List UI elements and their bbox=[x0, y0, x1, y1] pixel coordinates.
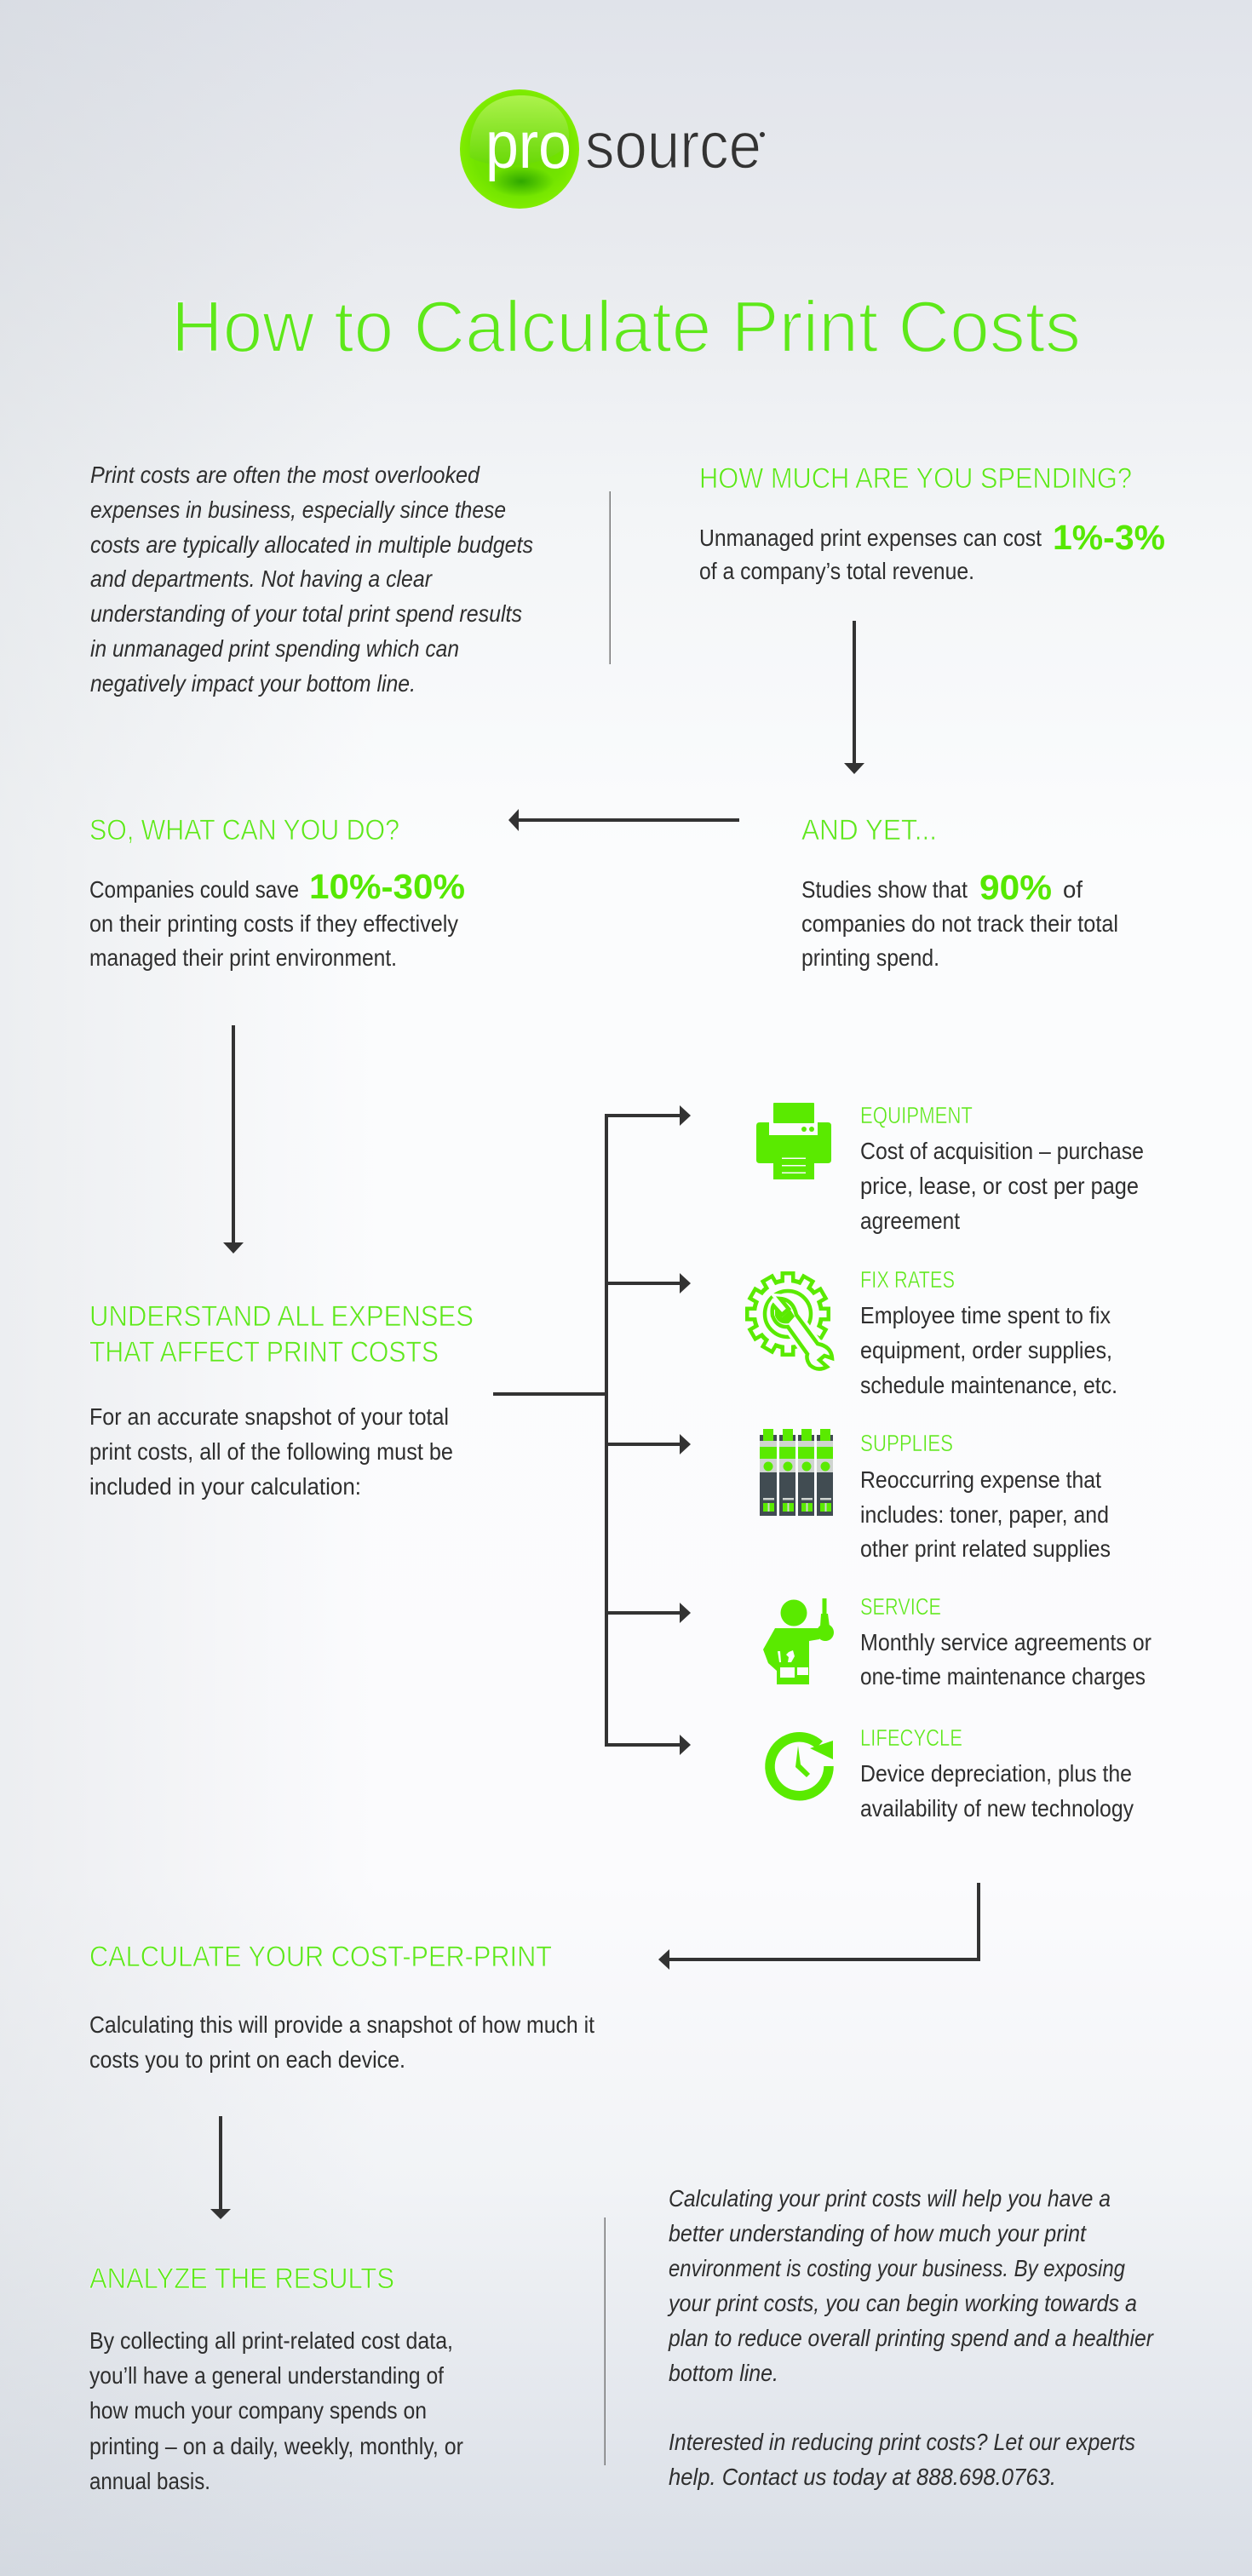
body: and yet: of bbox=[1063, 876, 1083, 903]
text: service bbox=[860, 1629, 1151, 1690]
text: service: Monthly service agreements or bbox=[860, 1629, 1151, 1655]
label: supplies: SUPPLIES bbox=[860, 1430, 953, 1456]
panel: how much are you spending bbox=[699, 462, 1165, 584]
row: lifecycle bbox=[860, 1724, 1134, 1822]
row: fix rates bbox=[860, 1266, 1117, 1398]
body: understand: For an accurate snapshot of your total bbox=[89, 1403, 449, 1430]
body: how much: Unmanaged print expenses can cost bbox=[699, 525, 1042, 551]
body: analyze: annual basis. bbox=[89, 2468, 210, 2494]
panel: calculate your cost-per-print bbox=[89, 1941, 594, 2073]
text block: conclusion and contact: help. Contact us today at 888.698.0763. bbox=[669, 2464, 1056, 2490]
icon: clock with arrow bbox=[770, 1737, 833, 1796]
text: fix rates: Employee time spent to fix bbox=[860, 1302, 1111, 1328]
stat: 90%: 90% bbox=[979, 868, 1052, 907]
body: so what bbox=[89, 876, 458, 971]
arrow: down from how much bbox=[844, 621, 864, 774]
body: analyze: you’ll have a general understanding of bbox=[89, 2362, 444, 2389]
body: and yet bbox=[801, 876, 1118, 971]
label: lifecycle: LIFECYCLE bbox=[860, 1724, 962, 1751]
text block: intro: and departments. Not having a clear bbox=[90, 565, 433, 592]
text: fix rates: schedule maintenance, etc. bbox=[860, 1372, 1117, 1398]
body: and yet: Studies show that bbox=[801, 876, 968, 903]
heading: how much: HOW MUCH ARE YOU SPENDING? bbox=[699, 462, 1132, 495]
text block: intro: understanding of your total print spend results bbox=[90, 600, 522, 627]
row: equipment bbox=[860, 1102, 1144, 1234]
body: understand: print costs, all of the following must be bbox=[89, 1438, 453, 1465]
text: lifecycle: Device depreciation, plus the bbox=[860, 1760, 1132, 1787]
body: and yet: companies do not track their total bbox=[801, 910, 1118, 937]
icon: printer bbox=[756, 1103, 831, 1179]
heading: and yet: AND YET... bbox=[801, 814, 937, 846]
bracket connector with five arrows bbox=[493, 1105, 691, 1755]
arrow: elbow to calculate cost-per-print bbox=[658, 1883, 980, 1970]
panel: analyze the results bbox=[89, 2263, 463, 2494]
panel: understand all expenses bbox=[89, 1300, 474, 1500]
body: how much bbox=[699, 525, 1042, 584]
label: fix rates: FIX RATES bbox=[860, 1266, 955, 1293]
text block: conclusion and contact: better understanding of how much your print bbox=[669, 2220, 1087, 2246]
text: supplies bbox=[860, 1466, 1111, 1562]
body: so what: Companies could save bbox=[89, 876, 299, 903]
arrow: down to understand expenses bbox=[223, 1025, 244, 1254]
panel: and yet bbox=[801, 814, 1118, 971]
body: calculate bbox=[89, 2011, 594, 2073]
text block: intro: in unmanaged print spending which can bbox=[90, 635, 459, 662]
text: supplies: includes: toner, paper, and bbox=[860, 1501, 1109, 1528]
text: supplies: other print related supplies bbox=[860, 1535, 1111, 1562]
heading: analyze: ANALYZE THE RESULTS bbox=[89, 2263, 394, 2295]
label: service: SERVICE bbox=[860, 1593, 941, 1620]
body: calculate: costs you to print on each device. bbox=[89, 2046, 405, 2073]
body: analyze: printing – on a daily, weekly, monthly, or bbox=[89, 2433, 463, 2459]
body: understand bbox=[89, 1403, 453, 1500]
text block: conclusion and contact: Calculating your print costs will help you have a bbox=[669, 2185, 1111, 2212]
text block: conclusion and contact: Interested in reducing print costs? Let our experts bbox=[669, 2429, 1135, 2455]
text block: conclusion and contact: environment is costing your business. By exposing bbox=[669, 2255, 1125, 2281]
label: equipment: EQUIPMENT bbox=[860, 1102, 973, 1128]
body: so what: on their printing costs if they effectively bbox=[89, 910, 458, 937]
text block: intro: Print costs are often the most overlooked bbox=[90, 462, 480, 488]
heading: understand bbox=[89, 1300, 474, 1368]
text block: intro: negatively impact your bottom line. bbox=[90, 670, 416, 697]
title: How to Calculate Print Costs bbox=[171, 287, 1081, 368]
arrow: left to what can you do bbox=[508, 809, 739, 831]
arrow: down to analyze results bbox=[210, 2116, 231, 2219]
text block: conclusion and contact: your print costs, you can begin working towards a bbox=[667, 2290, 1137, 2316]
icon: gear and wrench bbox=[745, 1271, 832, 1369]
text: equipment: agreement bbox=[860, 1208, 960, 1234]
text block: intro: costs are typically allocated in multiple budgets bbox=[90, 531, 533, 558]
text: equipment: Cost of acquisition – purchase bbox=[860, 1138, 1144, 1164]
text block: intro bbox=[90, 462, 533, 697]
text: equipment: price, lease, or cost per page bbox=[860, 1173, 1139, 1199]
body: analyze: By collecting all print-related cost data, bbox=[89, 2327, 453, 2354]
body: how much: of a company’s total revenue. bbox=[699, 558, 974, 584]
heading: calculate: CALCULATE YOUR COST-PER-PRINT bbox=[89, 1941, 552, 1973]
stat: 10%-30%: 10%-30% bbox=[309, 867, 465, 906]
text: lifecycle: availability of new technology bbox=[860, 1795, 1134, 1822]
text: fix rates: equipment, order supplies, bbox=[860, 1337, 1112, 1363]
body: calculate: Calculating this will provide a snapshot of how much it bbox=[89, 2011, 594, 2038]
icon: ink cartridges bbox=[760, 1429, 833, 1516]
heading: so what: SO, WHAT CAN YOU DO? bbox=[89, 814, 399, 846]
body: analyze: how much your company spends on bbox=[89, 2397, 427, 2424]
text: equipment bbox=[860, 1138, 1144, 1234]
stat: 1%-3%: 1%-3% bbox=[1053, 518, 1165, 557]
body: understand: included in your calculation: bbox=[89, 1473, 361, 1500]
row: supplies bbox=[860, 1430, 1111, 1562]
text block: conclusion and contact bbox=[667, 2185, 1154, 2490]
text block: conclusion and contact: bottom line. bbox=[669, 2360, 778, 2386]
heading: understand: THAT AFFECT PRINT COSTS bbox=[89, 1336, 439, 1368]
text: service: one-time maintenance charges bbox=[860, 1663, 1146, 1690]
row: service bbox=[860, 1593, 1151, 1690]
body: and yet: printing spend. bbox=[801, 944, 939, 971]
text: lifecycle bbox=[860, 1760, 1134, 1822]
icon: service technician bbox=[763, 1598, 834, 1684]
logo: prosource: source bbox=[585, 107, 761, 182]
body: analyze bbox=[89, 2327, 463, 2494]
text block: conclusion and contact: plan to reduce overall printing spend and a healthier bbox=[668, 2325, 1154, 2351]
body: so what: managed their print environment. bbox=[89, 944, 397, 971]
logo: prosource: pro bbox=[485, 107, 571, 182]
text: supplies: Reoccurring expense that bbox=[860, 1466, 1101, 1493]
logo: prosource bbox=[460, 89, 765, 209]
text: fix rates bbox=[860, 1302, 1117, 1398]
panel: so what can you do bbox=[89, 814, 465, 971]
text block: intro: expenses in business, especially since these bbox=[90, 496, 506, 523]
heading: understand: UNDERSTAND ALL EXPENSES bbox=[89, 1300, 474, 1333]
